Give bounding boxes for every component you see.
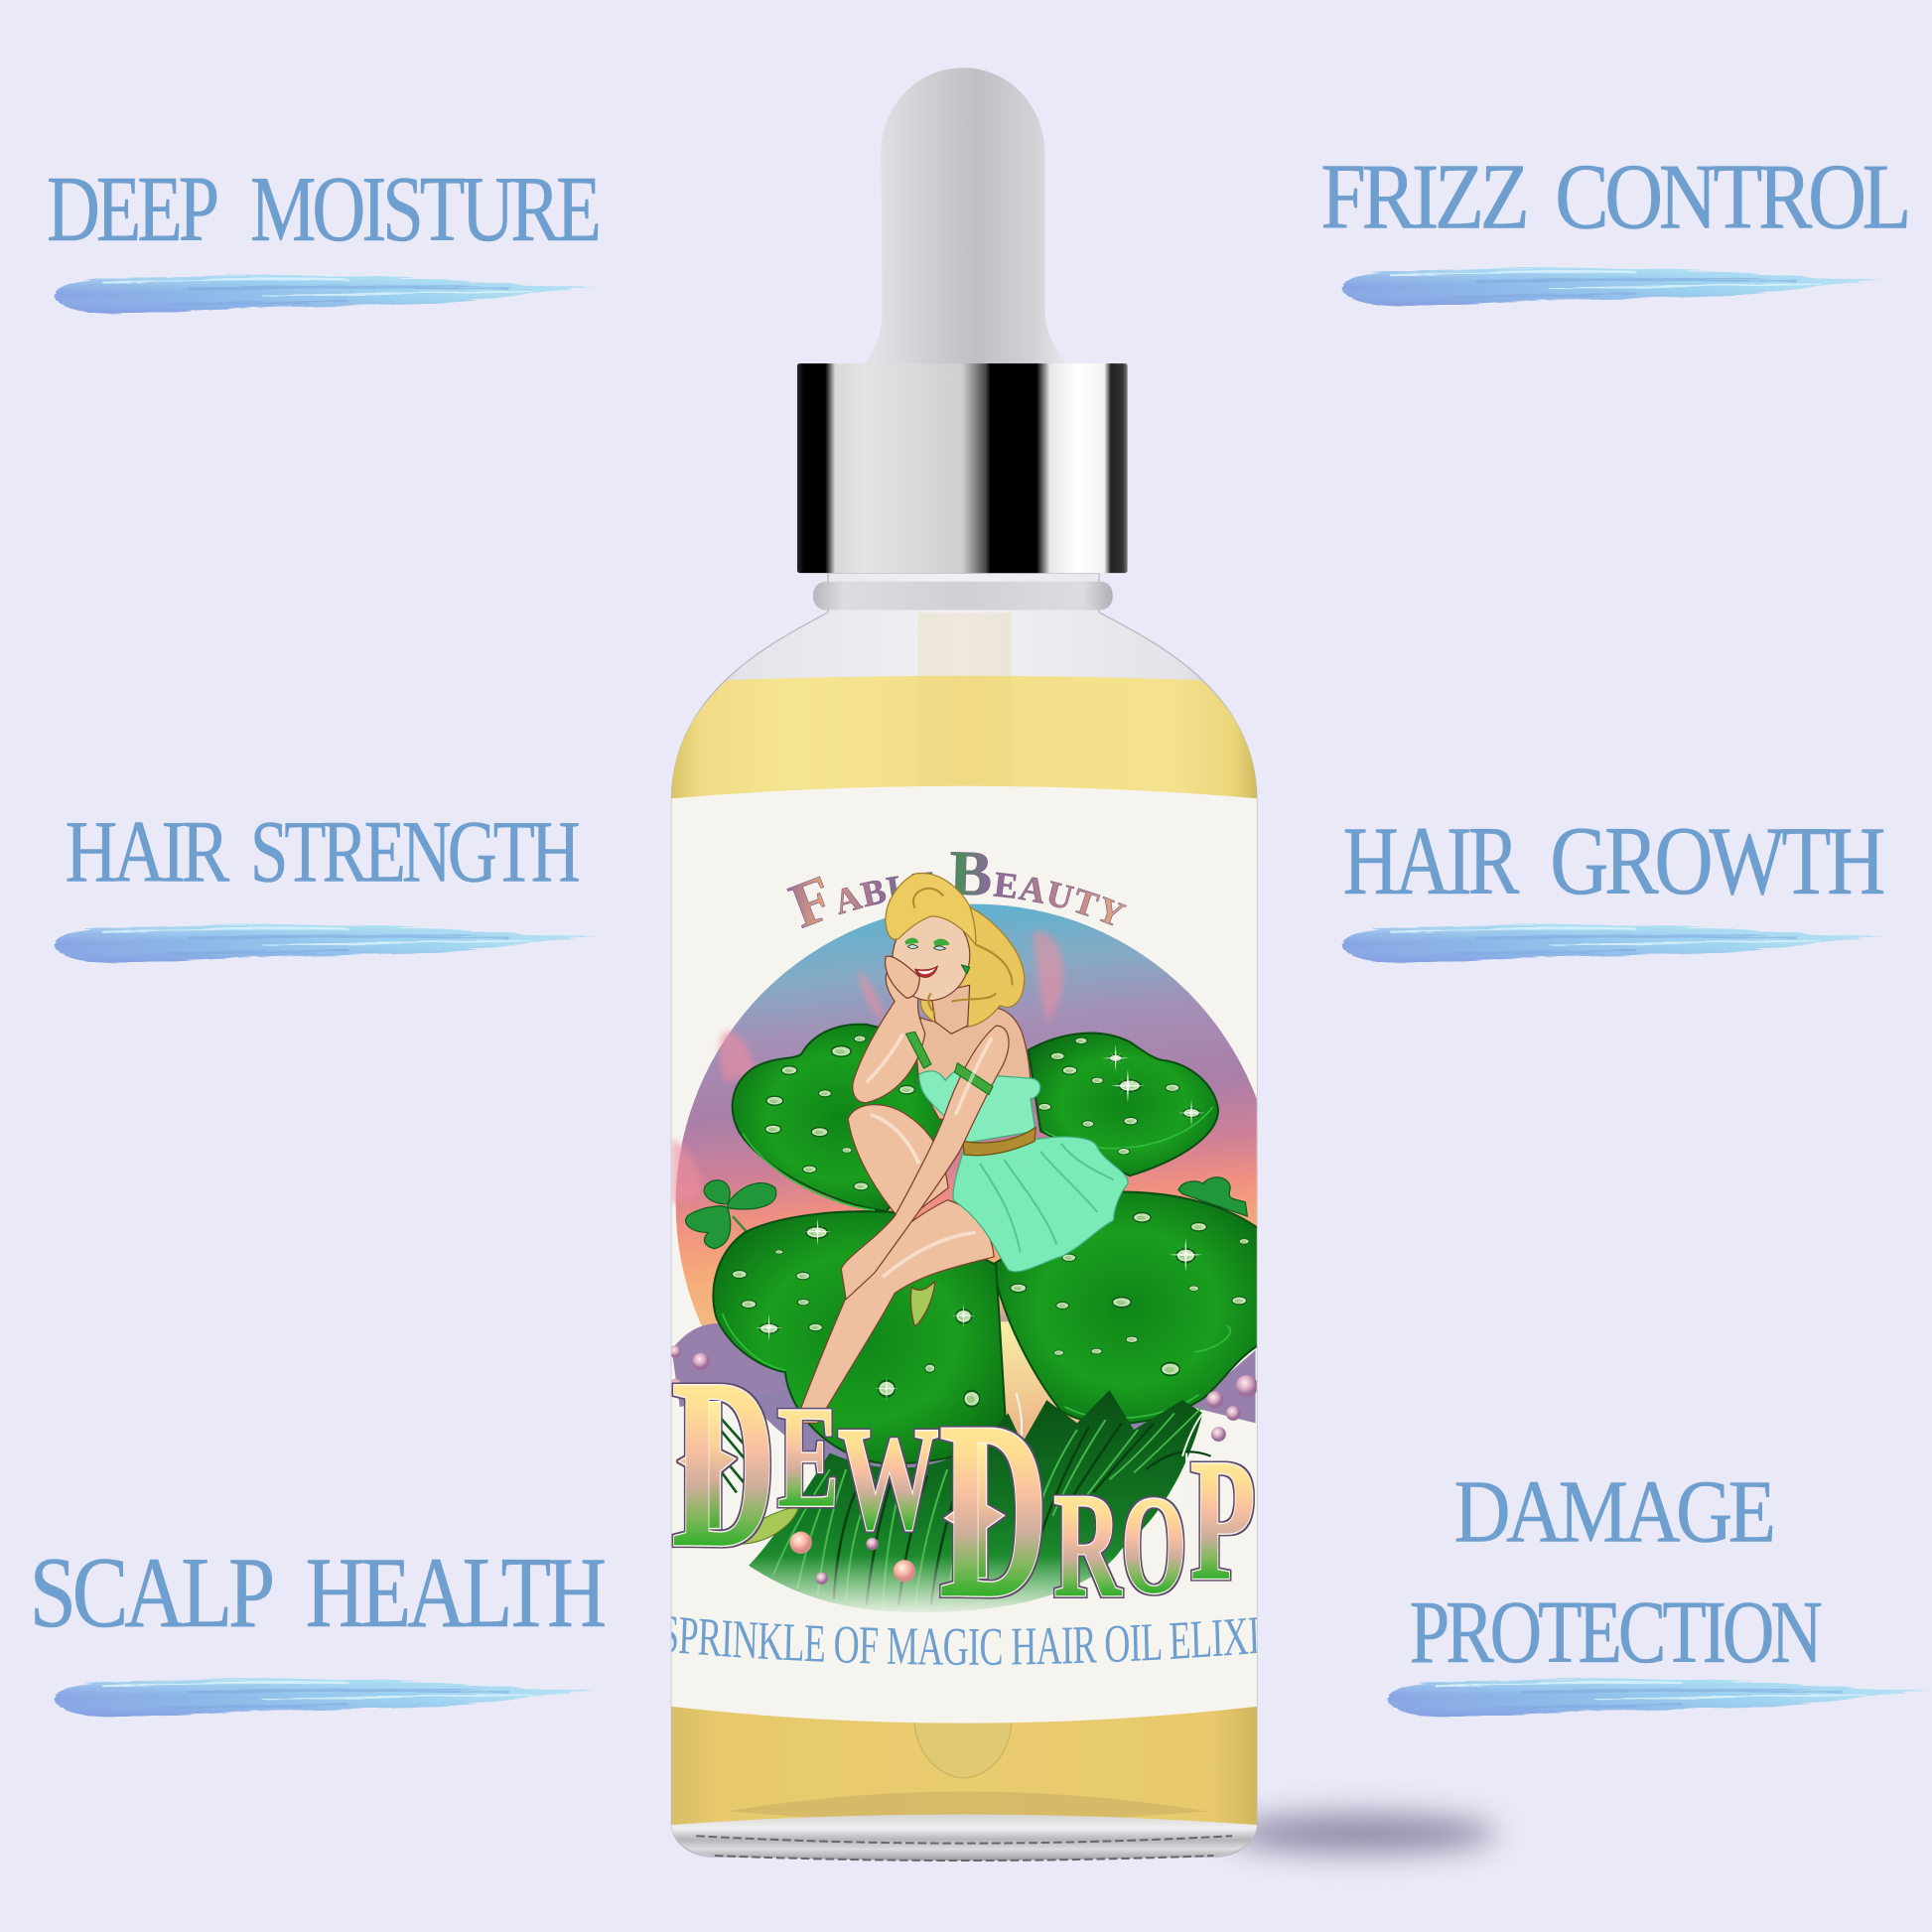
callout: hair strength (55, 802, 598, 963)
dropper tip (914, 1719, 1012, 1778)
dark blades (834, 1423, 1211, 1605)
illustration scene (672, 873, 1276, 1504)
glass base (671, 1814, 1257, 1861)
callout: deep moisture: DEEP (47, 158, 216, 261)
belt (963, 1127, 1035, 1156)
crossed leg (795, 1200, 994, 1423)
callout: frizz control: FRIZZ (1320, 146, 1526, 249)
raised leg (848, 1105, 948, 1222)
brand text: FABLE BEAUTY (786, 852, 1127, 929)
product title: P (1190, 1424, 1256, 1617)
product title: R (1053, 1461, 1122, 1628)
oil lower (671, 1688, 1257, 1828)
hair curl detail (913, 889, 1013, 1014)
product title: E (777, 1377, 839, 1538)
grass and title zone (712, 1390, 1231, 1618)
product title: D (671, 1328, 776, 1598)
clover leaf top right (1029, 1034, 1218, 1175)
front arm (841, 1026, 1009, 1300)
tagline path (998, 1649, 1932, 1665)
tagline: SPRINKLE OF MAGIC HAIR OIL ELIXIR (671, 1616, 1257, 1666)
sky circle (676, 904, 1276, 1504)
dropper bottle (671, 68, 1257, 1862)
white blades (1017, 1393, 1202, 1512)
bubbles (668, 1345, 1258, 1585)
shoe tip over grass (743, 1506, 799, 1544)
face (887, 908, 975, 1006)
callout: hair growth: HAIR (1343, 808, 1520, 915)
oil floor shading (727, 1792, 1207, 1821)
callout: damage protection (1387, 1461, 1931, 1717)
dropper tube in oil (918, 613, 1012, 797)
smile (915, 966, 937, 977)
dew drops (732, 1035, 1249, 1408)
supporting arm (853, 970, 925, 1103)
bodice (919, 1067, 1040, 1144)
silver collar (797, 363, 1128, 573)
label (671, 786, 1257, 1724)
skirt folds (980, 1144, 1114, 1253)
sparkles (756, 1044, 1205, 1401)
woman figure (795, 873, 1128, 1423)
ornament of first D (680, 1402, 735, 1528)
callout: hair strength: HAIR (66, 802, 229, 900)
oil upper (671, 676, 1257, 863)
product title: D (939, 1368, 1048, 1651)
hatch inside letter (712, 1413, 751, 1492)
shoe (911, 1281, 935, 1326)
product title: O (1121, 1466, 1186, 1622)
leaf highlights (723, 1107, 1230, 1419)
eye shadow (904, 938, 950, 947)
purple hills (672, 1323, 1256, 1423)
callout: frizz control (1320, 146, 1907, 306)
brand name (801, 895, 1182, 973)
product title: W (838, 1397, 939, 1561)
chest (915, 1007, 1031, 1123)
product title (671, 1328, 1256, 1651)
bottle shadow (1226, 1814, 1497, 1854)
callout: scalp health: SCALP (30, 1537, 272, 1649)
grass blades (773, 1407, 1202, 1608)
skirt (953, 1137, 1128, 1272)
callout: deep moisture: MOISTURE (250, 158, 598, 261)
hand (886, 956, 919, 998)
callout: scalp health (30, 1537, 605, 1717)
teeth (918, 968, 935, 974)
callout: deep moisture (47, 158, 598, 314)
callout: hair growth (1342, 808, 1885, 963)
ornament of second D (946, 1445, 1003, 1578)
eyes (907, 945, 946, 950)
grass fade (729, 1556, 1231, 1618)
callout: hair strength: STRENGTH (250, 802, 579, 900)
callout: damage protection: DAMAGE (1453, 1461, 1772, 1562)
small clover right (1178, 1177, 1247, 1216)
callout: damage protection: PROTECTION (1410, 1582, 1822, 1682)
neck ring (813, 582, 1113, 610)
callout: scalp health: HEALTH (306, 1537, 605, 1649)
glass neck and shoulder (671, 573, 1257, 1857)
label art clipped (671, 852, 1257, 1666)
dropper bulb (865, 68, 1067, 364)
grass mass (749, 1390, 1202, 1612)
small clover left (686, 1180, 776, 1249)
clover leaf top left (733, 1025, 947, 1211)
hair back (920, 904, 1025, 1028)
glow behind clover gap (1001, 1321, 1080, 1440)
clouds (672, 931, 1063, 1204)
clover leaf bottom left (713, 1211, 1006, 1463)
neck (931, 985, 970, 1034)
armbands (906, 1032, 993, 1095)
earring (962, 965, 970, 974)
hair front (886, 873, 976, 945)
skin highlights (867, 1034, 992, 1277)
clover leaf bottom right (992, 1192, 1264, 1424)
base contour (696, 1836, 1232, 1861)
